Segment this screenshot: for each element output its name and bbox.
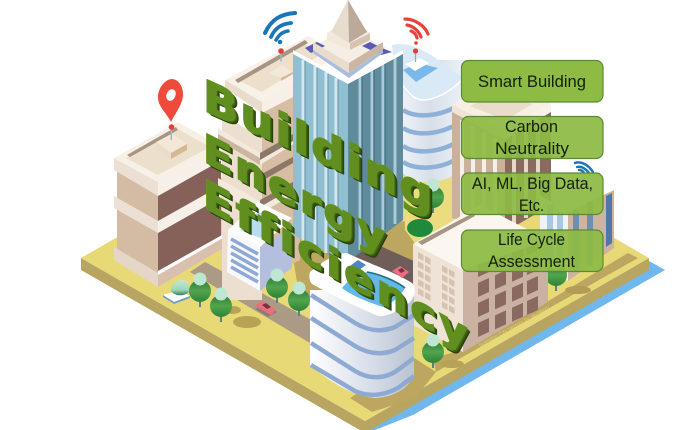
box: Smart Building <box>462 60 603 102</box>
roof tile and red wifi <box>403 19 438 82</box>
3D title: Building: Building <box>203 70 434 224</box>
small roof block <box>156 134 187 153</box>
building: left tower <box>114 122 223 287</box>
road <box>190 262 315 346</box>
box: Smart Building: Smart Building <box>478 73 586 91</box>
box: Carbon Neutrality <box>462 116 603 158</box>
front round tower <box>309 253 415 398</box>
building: right beige tower <box>452 82 551 232</box>
building: round blue tower back <box>392 44 466 182</box>
3D title: Efficiency: Efficiency <box>203 171 470 362</box>
box: Carbon Neutrality: Neutrality <box>495 140 570 158</box>
sidewalk band <box>433 253 638 372</box>
car: pink rear <box>392 266 409 278</box>
box: AI, ML, Big Data, Etc.: AI, ML, Big Data, <box>472 175 593 193</box>
icon: blue wifi <box>265 13 295 61</box>
building: central glass tower <box>293 0 403 262</box>
building: small white block <box>227 202 292 291</box>
dark road <box>345 245 416 295</box>
icon: red location pin <box>158 79 183 140</box>
water <box>362 261 665 430</box>
box: Life Cycle Assessment: Assessment <box>488 253 575 271</box>
car: pink <box>255 301 277 317</box>
watermark text: Isometric City Vectors by Vecteezy <box>478 305 551 349</box>
tan patch under front tower <box>350 358 436 412</box>
building: small right tower <box>540 190 614 281</box>
icon: right blue wifi <box>575 162 593 173</box>
box: Carbon Neutrality: Carbon <box>505 118 558 136</box>
box: AI, ML, Big Data, Etc. <box>462 173 603 215</box>
3D title: Energy: Energy <box>203 125 387 265</box>
trees and park <box>163 178 464 368</box>
building: front beige block <box>413 205 548 352</box>
platform top <box>81 95 649 421</box>
box: Life Cycle Assessment <box>462 230 603 272</box>
plaza <box>404 165 470 250</box>
back ground patch <box>290 220 425 300</box>
box: AI, ML, Big Data, Etc.: Etc. <box>519 197 544 215</box>
building: stepped beige tower <box>218 36 340 300</box>
tree: right <box>545 256 591 294</box>
platform side <box>81 258 649 430</box>
box: Life Cycle Assessment: Life Cycle <box>498 231 565 249</box>
